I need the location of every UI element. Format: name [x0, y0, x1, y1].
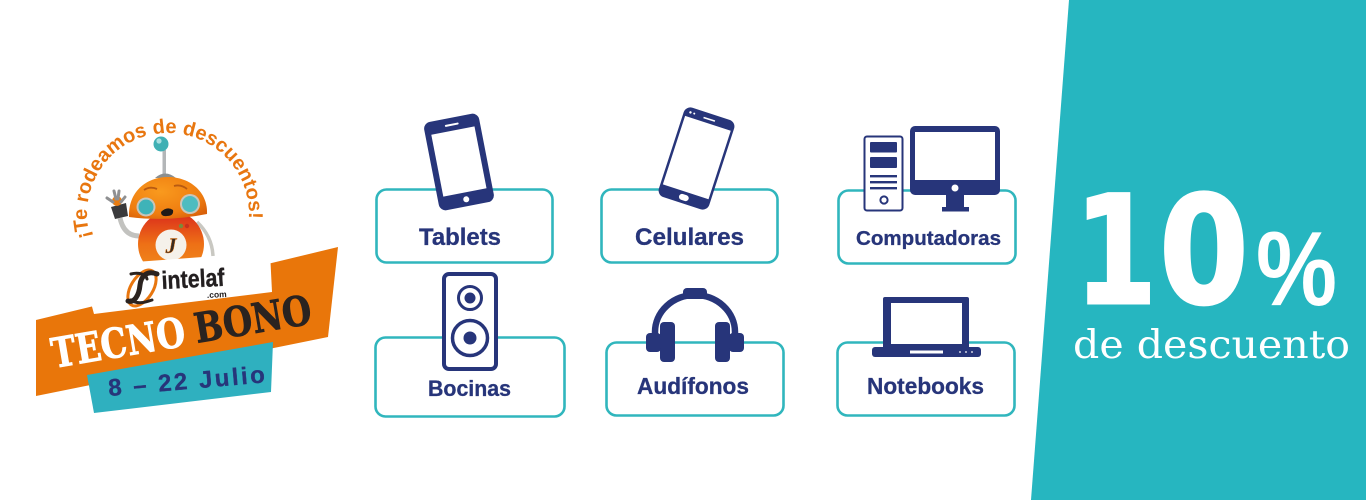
icon: laptop: [872, 297, 981, 357]
orange ribbon: [36, 247, 338, 396]
date text: 8 – 22 Julio: [107, 361, 266, 402]
label: computadoras: Computadoras: [856, 228, 1001, 250]
date banner: [87, 342, 273, 413]
icon: monitor: [910, 126, 1000, 212]
logo mark: [122, 265, 162, 311]
panel: tablets: [376, 112, 552, 262]
icon: tablet: [423, 112, 495, 212]
robot mascot: [107, 136, 213, 277]
logo wordmark: intelaf: [161, 264, 226, 295]
logo domain: .com: [207, 289, 227, 300]
robot head: [129, 177, 207, 219]
panel: notebooks: [838, 297, 1014, 416]
icon: smartphone: [657, 106, 736, 211]
bono wordmark: BONO: [191, 286, 315, 353]
icon: desktop tower: [864, 136, 902, 210]
tecno wordmark: TECNO: [48, 308, 189, 378]
panel: audifonos: [606, 288, 784, 416]
label: tablets: Tablets: [419, 224, 501, 251]
panel: bocinas: [376, 274, 564, 416]
panel: discount: [1031, 0, 1366, 500]
panel: celulares: [602, 106, 778, 263]
discount digit one: 1: [1074, 164, 1157, 339]
label: bocinas: Bocinas: [428, 376, 511, 401]
robot body: J: [164, 233, 178, 258]
panel: computadoras: [838, 126, 1016, 264]
discount digit zero: 0: [1159, 164, 1249, 338]
discount caption: de descuento: [1073, 323, 1350, 368]
label: celulares: Celulares: [635, 224, 744, 251]
robot body: [138, 211, 213, 277]
icon: headphones: [646, 288, 744, 362]
label: audifonos: Audífonos: [637, 373, 749, 399]
icon: speaker: [444, 274, 496, 369]
white logo card: [81, 252, 272, 314]
intelaf logo: [122, 264, 227, 311]
label: notebooks: Notebooks: [867, 373, 984, 399]
robot arm: [107, 191, 139, 236]
percent sign: %: [1256, 210, 1337, 328]
panel: tecno bono logo: [36, 118, 338, 413]
slogan arc: ¡Te rodeamos de descuentos!: [73, 118, 263, 238]
robot antenna: [154, 136, 176, 178]
